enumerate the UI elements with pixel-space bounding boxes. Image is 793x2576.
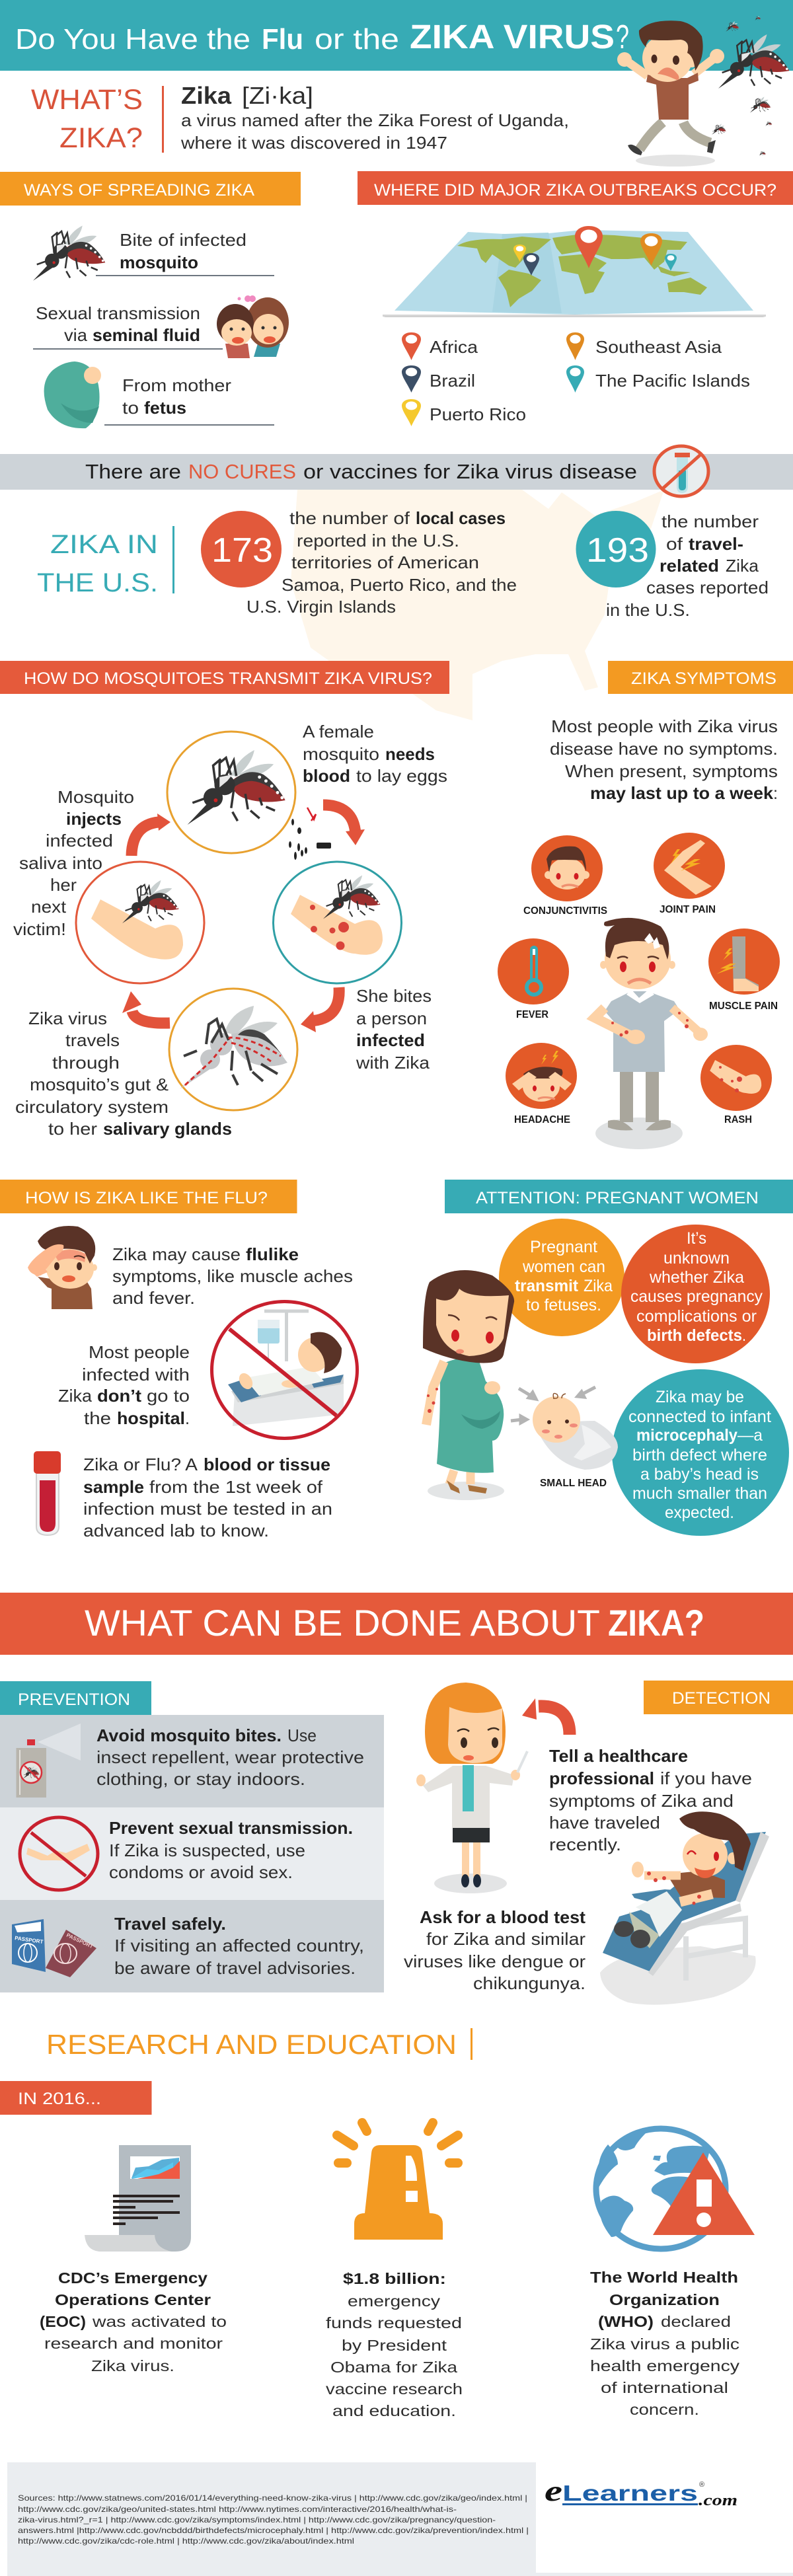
text: sexual transmission: via <box>64 325 88 345</box>
text: funding: and education. <box>332 2402 456 2419</box>
column: funding <box>326 2123 463 2419</box>
column: CDC EOC <box>40 2145 227 2374</box>
text: WHO: The World Health <box>590 2269 738 2286</box>
text: blood sample: advanced lab to know. <box>83 1521 269 1540</box>
text: funding: funds requested <box>326 2314 462 2331</box>
what's Zika definition: where it was discovered in 1947 <box>180 133 447 153</box>
icon: report <box>85 2145 191 2252</box>
text: CDC <box>40 2269 227 2374</box>
text: mother to fetus: fetus <box>144 398 186 418</box>
symptom: conjunctivitis: CONJUNCTIVITIS <box>523 905 607 917</box>
text: step 2 <box>356 986 432 1073</box>
text: mother to fetus: From mother <box>122 375 231 395</box>
illustration: patient in chair <box>600 1811 769 2005</box>
legend <box>402 332 750 426</box>
logo: eLearners.com: e <box>545 2475 562 2507</box>
text: WHO: Zika virus a public <box>590 2335 739 2353</box>
bubble: microcephaly: much smaller than <box>632 1484 767 1503</box>
text: step 1: to lay eggs <box>356 766 447 786</box>
cycle step: injects <box>76 862 204 983</box>
arrows pointing to baby's head <box>511 1387 595 1423</box>
bubble: transmit <box>499 1219 624 1336</box>
footer: sources: Sources: http://www.statnews.com/2016/01/14/everything-need-know-zika-virus | http://www.cdc.gov/zika/geo/index.html | <box>18 2493 527 2503</box>
stat 193: Zika <box>726 556 759 576</box>
no cures banner: NO CURES <box>188 460 296 483</box>
bubble: microcephaly: —a <box>737 1426 763 1445</box>
no cures banner: or vaccines for Zika virus disease <box>303 460 637 483</box>
text: symptoms intro <box>550 716 778 803</box>
text: step 3: to her <box>48 1119 97 1139</box>
panel: outbreaks: WHERE DID MAJOR ZIKA OUTBREAKS OCCUR? <box>374 181 776 200</box>
bubble: unknown <box>621 1225 770 1363</box>
header band with title: Do You Have the <box>15 23 250 56</box>
header band with title: ? <box>616 18 629 56</box>
stat 193: 193 <box>586 531 649 570</box>
panel: detection: DETECTION <box>672 1689 771 1708</box>
logo: eLearners.com: .com <box>699 2492 737 2509</box>
legend: The Pacific Islands <box>595 371 750 391</box>
arrows around cycle <box>122 805 365 1032</box>
text: tell a professional: symptoms of Zika and <box>549 1791 734 1811</box>
text: mother to fetus: to <box>122 398 139 418</box>
bubble: microcephaly: a baby’s head is <box>640 1465 759 1484</box>
text: funding <box>326 2270 463 2419</box>
text: step 1 <box>303 722 447 786</box>
text: ask for test: Ask for a blood test <box>420 1907 585 1927</box>
symptom: conjunctivitis <box>523 835 607 917</box>
text: blood sample: Zika or Flu? A <box>83 1455 198 1474</box>
icon: no sex <box>20 1817 98 1890</box>
text: hospital: Zika <box>58 1386 93 1406</box>
section banner: what can be done: WHAT CAN BE DONE ABOUT <box>85 1602 600 1644</box>
illustration: running man <box>617 20 724 167</box>
text: sexual transmission: Sexual transmission <box>36 303 200 323</box>
text: prevent sexual transmission <box>109 1818 353 1882</box>
text: hospital: the <box>84 1408 111 1428</box>
text: prevent sexual transmission: condoms or avoid sex. <box>109 1862 293 1882</box>
header band with title: ZIKA VIRUS <box>410 18 615 56</box>
text: tell a professional: have traveled <box>549 1813 660 1833</box>
what's Zika definition: [Zi·ka] <box>242 82 313 109</box>
stat 193: of <box>666 534 683 554</box>
text: step 4: victim! <box>13 919 66 939</box>
symptom: rash: RASH <box>724 1114 752 1125</box>
bubble: unknown: whether Zika <box>649 1268 744 1287</box>
text: ask for test <box>404 1907 585 1993</box>
text: step 3: through <box>52 1053 120 1073</box>
illustration: sick man <box>595 918 708 1149</box>
icon: no test tube <box>654 446 708 496</box>
icon: couple <box>217 295 289 358</box>
tag: in 2016 <box>0 2081 152 2115</box>
text: CDC: CDC’s Emergency <box>58 2269 208 2287</box>
text: CDC: (EOC) <box>40 2313 86 2330</box>
panel: Zika in the US: ZIKA IN <box>50 530 158 559</box>
panel: how Zika is like the flu <box>0 1180 357 1540</box>
text: ask for test: viruses like dengue or <box>404 1951 585 1971</box>
text: step 1: blood <box>303 766 350 786</box>
text: CDC: Zika virus. <box>91 2357 174 2374</box>
text: blood sample: infection must be tested in an <box>83 1499 332 1519</box>
bubble: microcephaly: microcephaly <box>636 1426 737 1445</box>
panel: attention pregnant women <box>423 1180 793 1536</box>
arrow: to doctor <box>522 1698 570 1735</box>
panel: symptoms: ZIKA SYMPTOMS <box>631 669 776 688</box>
text: step 4: saliva into <box>19 853 102 873</box>
text: step 4: Mosquito <box>57 787 134 807</box>
what's Zika definition: Zika <box>181 82 232 109</box>
text: hospital: hospital <box>117 1408 185 1428</box>
stat 173: Samoa, Puerto Rico, and the <box>282 575 517 595</box>
text: CDC: research and monitor <box>44 2335 223 2352</box>
what's Zika definition: a virus named after the Zika Forest of Uganda, <box>181 110 569 130</box>
text: step 4: next <box>31 897 67 917</box>
text: step 1: mosquito <box>303 744 379 764</box>
stat 193: cases reported <box>646 578 769 597</box>
panel: how mosquitoes transmit: HOW DO MOSQUITOES TRANSMIT ZIKA VIRUS? <box>24 669 432 688</box>
legend: Southeast Asia <box>595 337 722 357</box>
symptom: rash <box>700 1045 772 1125</box>
logo: eLearners.com: ® <box>699 2481 704 2489</box>
legend: Brazil <box>430 371 475 391</box>
text: symptoms intro: : <box>773 783 778 803</box>
symptom: fever: FEVER <box>516 1009 548 1020</box>
text: symptoms intro: Most people with Zika virus <box>551 716 778 736</box>
text: bite <box>96 230 274 276</box>
text: avoid bites: clothing, or stay indoors. <box>96 1769 305 1789</box>
text: flulike <box>112 1244 353 1308</box>
stat 173 <box>201 508 517 617</box>
text: tell a professional <box>549 1746 752 1854</box>
text: step 1: needs <box>385 744 435 764</box>
text: prevent sexual transmission: If Zika is suspected, use <box>109 1840 305 1860</box>
footer: sources: answers.html |http://www.cdc.gov/ncbddd/birthdefects/microcephaly.html | http://www.cdc.gov/zika/prevention/index.html | <box>18 2526 529 2535</box>
text: ask for test: chikungunya. <box>473 1973 585 1993</box>
text: tell a professional: professional <box>549 1768 654 1788</box>
eggs and larvae <box>289 808 331 860</box>
text: travel safely: be aware of travel advisories. <box>114 1958 356 1978</box>
cycle step: bites infected person <box>274 862 402 983</box>
text: step 2: infected <box>356 1030 425 1050</box>
bubble: transmit: Pregnant <box>530 1238 597 1256</box>
panel: prevention: PREVENTION <box>18 1690 130 1709</box>
panel: outbreaks <box>358 171 793 426</box>
text: avoid bites: Use <box>287 1725 317 1745</box>
heading: research and education: RESEARCH AND EDUCATION <box>46 2029 457 2060</box>
panel: ways of spreading <box>0 172 301 428</box>
text: step 2: She bites <box>356 986 432 1006</box>
text: prevent sexual transmission: Prevent sexual transmission. <box>109 1818 353 1838</box>
text: CDC: Operations Center <box>55 2291 211 2308</box>
symptom: muscle pain <box>708 928 780 1012</box>
text: funding: emergency <box>348 2292 440 2310</box>
text: avoid bites: insect repellent, wear protective <box>96 1747 364 1767</box>
icon: mosquito <box>33 225 105 281</box>
bubble: transmit: transmit <box>515 1277 579 1295</box>
text: WHO: of international <box>601 2379 728 2396</box>
text: step 3: Zika virus <box>28 1008 107 1028</box>
text: hospital <box>58 1342 190 1428</box>
text: step 3: travels <box>65 1030 120 1050</box>
text: WHO: concern. <box>630 2401 699 2418</box>
text: step 4: injects <box>66 809 122 829</box>
text: funding: $1.8 billion: <box>343 2270 446 2287</box>
symptom: muscle pain: MUSCLE PAIN <box>709 1001 778 1012</box>
bubble: transmit: women can <box>522 1258 605 1276</box>
icon: passports <box>12 1919 96 1977</box>
bubble: unknown: . <box>742 1326 746 1345</box>
logo: eLearners.com <box>545 2475 737 2509</box>
illustration: pregnant woman <box>423 1270 514 1500</box>
text: WHO: health emergency <box>590 2357 739 2374</box>
icon: mother belly <box>44 361 101 428</box>
text: hospital: infected with <box>82 1365 190 1384</box>
stat 173: U.S. Virgin Islands <box>246 597 396 617</box>
bubble: unknown: unknown <box>663 1249 730 1268</box>
footer: sources <box>7 2462 793 2576</box>
text: tell a professional: if you have <box>660 1768 752 1788</box>
bubble: microcephaly <box>612 1369 789 1536</box>
text: step 2: with Zika <box>356 1053 430 1073</box>
stat 193: related <box>660 556 719 576</box>
panel: prevention <box>0 1681 384 1992</box>
text: step 2: a person <box>356 1008 427 1028</box>
symptom: fever <box>498 938 569 1020</box>
text: step 4: infected <box>46 831 113 851</box>
text: sexual transmission <box>33 303 223 350</box>
no cures banner <box>0 446 793 496</box>
icon: boy with headache <box>28 1226 97 1309</box>
text: WHO: Organization <box>609 2291 720 2308</box>
footer: sources: zika-virus.html?_r=1 | http://www.cdc.gov/zika/symptoms/index.html | http://www.cdc.gov/zika/pregnancy/question- <box>18 2515 496 2524</box>
stat 193: travel- <box>689 534 743 554</box>
header band with title: Flu <box>262 23 303 56</box>
text: hospital: Most people <box>89 1342 190 1362</box>
bubble: unknown: causes pregnancy <box>630 1287 763 1306</box>
panel: how Zika is like the flu: HOW IS ZIKA LIKE THE FLU? <box>25 1189 268 1207</box>
no cures banner: There are <box>85 460 181 483</box>
footer: sources: http://www.cdc.gov/zika/cdc-role.html | http://www.cdc.gov/zika/about/index.html <box>18 2536 354 2546</box>
text: avoid bites: Avoid mosquito bites. <box>96 1725 282 1745</box>
text: symptoms intro: may last up to a week <box>590 783 774 803</box>
world map <box>383 230 766 317</box>
text: travel safely: Travel safely. <box>114 1914 226 1934</box>
icon: alarm <box>337 2123 458 2240</box>
text: step 3: salivary glands <box>103 1119 232 1139</box>
text: CDC: was activated to <box>92 2313 227 2330</box>
panel: attention pregnant women: ATTENTION: PREGNANT WOMEN <box>476 1189 759 1207</box>
cycle step: needs blood <box>167 732 295 853</box>
background: faint US map <box>291 490 664 720</box>
text: tell a professional: recently. <box>549 1835 621 1854</box>
legend: Africa <box>430 337 478 357</box>
icon: blood sample tube <box>34 1451 61 1535</box>
what's Zika definition: WHAT’S <box>31 84 143 116</box>
bubble: microcephaly: expected. <box>665 1503 734 1522</box>
text: sexual transmission: seminal fluid <box>93 325 200 345</box>
text: funding: vaccine research <box>326 2380 463 2398</box>
text: step 3: mosquito’s gut & <box>30 1075 169 1094</box>
logo: eLearners.com: Learners <box>562 2481 698 2505</box>
header band with title: or the <box>315 23 399 56</box>
panel: Zika in the US <box>37 508 769 620</box>
icon: repellent spray <box>16 1724 81 1798</box>
bubble: unknown: birth defects <box>647 1326 742 1345</box>
symptom: headache <box>506 1043 577 1125</box>
stat 173: 173 <box>211 531 273 570</box>
bubble: transmit: Zika <box>584 1277 613 1295</box>
stat 193 <box>576 511 769 620</box>
illustration: baby with small head <box>511 1387 618 1489</box>
column: WHO <box>590 2129 755 2418</box>
text: blood sample: from the 1st week of <box>149 1477 323 1497</box>
text: WHO: declared <box>661 2313 731 2330</box>
bubble: transmit: to fetuses. <box>526 1296 601 1314</box>
text: step 3 <box>15 1008 232 1139</box>
text: travel safely <box>114 1914 364 1978</box>
icon: passports: PASSPORT <box>15 1935 44 1945</box>
stat 173: reported in the U.S. <box>297 531 459 550</box>
text: WHO: (WHO) <box>598 2313 654 2330</box>
stat 173: the number of <box>289 508 410 528</box>
text: blood sample <box>83 1455 332 1540</box>
text: travel safely: If visiting an affected country, <box>114 1936 364 1955</box>
section banner: what can be done <box>0 1593 793 1655</box>
illustration: baby with small head: SMALL HEAD <box>540 1478 607 1489</box>
text: blood sample: sample <box>83 1477 144 1497</box>
panel: how mosquitoes transmit <box>0 661 449 1139</box>
panel: Zika in the US: THE U.S. <box>37 568 158 597</box>
text: hospital: . <box>185 1408 190 1428</box>
stat 173: local cases <box>416 508 506 528</box>
symptom: joint pain <box>654 833 725 915</box>
text: blood sample: blood or tissue <box>204 1455 330 1474</box>
illustration: doctor <box>416 1683 527 1893</box>
legend: Puerto Rico <box>430 404 526 424</box>
bubble: microcephaly: Zika may be <box>656 1388 744 1406</box>
illustration: mosquitoes around the man <box>712 16 789 156</box>
text: hospital: go to <box>147 1386 190 1406</box>
text: hospital: don’t <box>97 1386 141 1406</box>
text: bite: mosquito <box>120 252 198 272</box>
text: flulike: and fever. <box>112 1288 195 1308</box>
text: avoid bites <box>96 1725 364 1789</box>
icon: passports: PASSPORT <box>65 1932 94 1950</box>
icon: globe with warning <box>596 2129 755 2249</box>
stat 193: in the U.S. <box>606 600 690 620</box>
header band with title <box>0 0 793 71</box>
text: WHO <box>590 2269 739 2418</box>
text: funding: Obama for Zika <box>330 2359 458 2376</box>
symptom: joint pain: JOINT PAIN <box>660 904 716 915</box>
text: symptoms intro: When present, symptoms <box>565 761 778 781</box>
panel: detection <box>404 1681 793 2005</box>
tag: in 2016: IN 2016... <box>18 2090 101 2108</box>
stat 173: territories of American <box>291 552 479 572</box>
text: bite: Bite of infected <box>120 230 246 250</box>
cycle step: virus travels in gut <box>169 989 297 1110</box>
footer: sources: http://www.cdc.gov/zika/geo/united-states.html http://www.nytimes.com/interactive/2016/health/what-is- <box>18 2505 457 2514</box>
text: funding: by President <box>342 2337 447 2354</box>
bubble: microcephaly: birth defect where <box>632 1446 767 1464</box>
text: step 1: A female <box>303 722 374 741</box>
symptom: headache: HEADACHE <box>514 1114 570 1125</box>
text: flulike: Zika may cause <box>112 1244 241 1264</box>
panel: ways of spreading: WAYS OF SPREADING ZIKA <box>24 181 254 200</box>
text: step 4 <box>13 787 134 939</box>
what's Zika definition: ZIKA? <box>59 122 143 154</box>
bubble: unknown: complications or <box>636 1307 757 1326</box>
what's Zika definition <box>31 82 569 154</box>
text: tell a professional: Tell a healthcare <box>549 1746 688 1766</box>
icon: no hospital <box>211 1302 357 1438</box>
text: mother to fetus <box>104 375 274 426</box>
stat 193: the number <box>661 511 759 531</box>
text: ask for test: for Zika and similar <box>426 1929 585 1949</box>
bubble: microcephaly: connected to infant <box>628 1408 771 1426</box>
text: symptoms intro: disease have no symptoms. <box>550 739 778 759</box>
text: step 3: circulatory system <box>15 1097 169 1117</box>
text: step 4: her <box>50 875 77 895</box>
panel: symptoms <box>498 661 793 1149</box>
bubble: unknown: It’s <box>687 1229 706 1248</box>
section banner: what can be done: ZIKA? <box>608 1602 704 1644</box>
map pins <box>513 226 677 276</box>
text: flulike: flulike <box>246 1244 299 1264</box>
text: flulike: symptoms, like muscle aches <box>112 1266 353 1286</box>
